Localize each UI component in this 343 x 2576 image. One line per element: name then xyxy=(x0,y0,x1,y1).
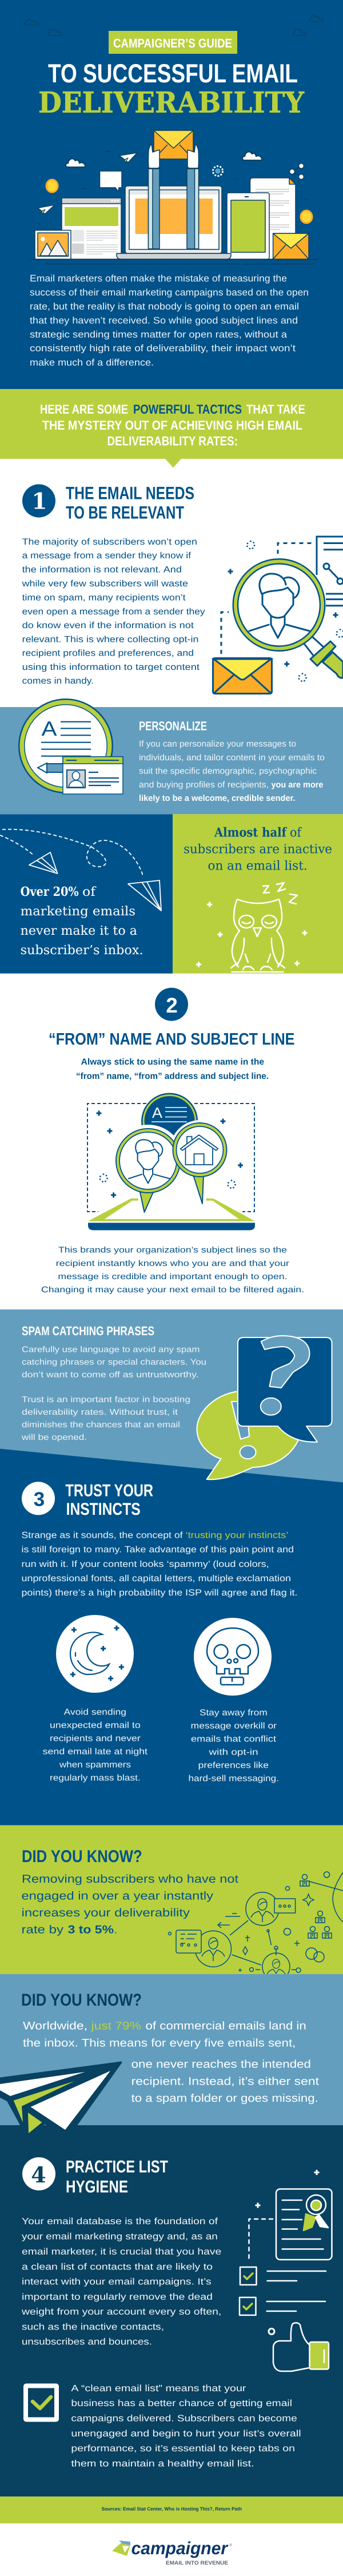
clean email list text: A “clean email list” means that your xyxy=(71,2384,246,2394)
document xyxy=(250,178,296,259)
clean email list text: campaigns delivered. Subscribers can become xyxy=(71,2414,297,2423)
heading: THE EMAIL NEEDS xyxy=(66,483,194,503)
stat text xyxy=(184,825,332,874)
body text: will be opened. xyxy=(21,1433,87,1442)
illustration: people network xyxy=(168,1872,343,1980)
icon: sleeping owl xyxy=(196,883,308,972)
heading: “FROM” NAME AND SUBJECT LINE xyxy=(49,1030,295,1049)
body text: If you can personalize your messages to xyxy=(139,739,296,749)
number 3 badge: 3 xyxy=(34,1489,45,1510)
body text xyxy=(21,2217,221,2347)
illustration: location pins on tablet: A xyxy=(152,1104,163,1121)
title xyxy=(38,58,305,119)
body text: catching phrases or special characters. You xyxy=(22,1358,206,1367)
panel: practice list hygiene xyxy=(0,2062,343,2496)
section 3: trust your instincts xyxy=(22,1482,297,1784)
heading: DID YOU KNOW? xyxy=(21,1991,142,2010)
caption: stay away: Stay away from xyxy=(200,1708,268,1717)
paragraph xyxy=(41,1246,304,1295)
body text xyxy=(22,1873,239,1936)
body text: important to regularly remove the dead xyxy=(22,2292,213,2302)
body text: increases your deliverability xyxy=(22,1907,190,1919)
body text: Carefully use language to avoid any spam xyxy=(22,1345,200,1355)
banner heading: HERE ARE SOME xyxy=(40,402,128,416)
intro text: Email marketers often make the mistake of measuring the xyxy=(30,273,287,284)
intro text xyxy=(30,273,309,368)
body text: the information is not relevant. And xyxy=(22,565,182,575)
intro text: consistently high rate of deliverability, their impact won’t xyxy=(30,343,296,354)
browser window xyxy=(62,198,121,259)
icon: moon and stars xyxy=(56,1615,134,1693)
body text: weight from your account every so often, xyxy=(21,2307,221,2317)
intro text: strategic sending times matter for open rates, without a xyxy=(30,330,288,340)
body text: a clean list of contacts that are likely to xyxy=(22,2262,213,2272)
envelope held up xyxy=(154,130,193,159)
logo: campaigner: campaigner xyxy=(131,2538,229,2558)
clean email list text: performance, so it’s essential to keep tabs on xyxy=(71,2444,295,2454)
small envelope xyxy=(273,233,309,259)
clean email list text xyxy=(71,2384,301,2469)
banner heading: THAT TAKE xyxy=(246,402,305,416)
body text xyxy=(139,739,325,803)
clean email list text: unengaged and begin to hurt your list’s overall xyxy=(71,2429,301,2439)
title: DELIVERABILITY xyxy=(38,86,305,119)
panel: did you know 2 xyxy=(0,1974,343,2125)
stat text: on an email list. xyxy=(208,859,308,874)
body text: a message from a sender they know if xyxy=(22,551,192,561)
number 3 badge xyxy=(22,1482,55,1515)
number 2 badge: 2 xyxy=(166,994,178,1017)
body text: Your email database is the foundation of xyxy=(22,2217,218,2226)
heading xyxy=(66,483,194,523)
caption: avoid sending: Avoid sending xyxy=(64,1707,126,1717)
body text: email marketer, it is crucial that you have xyxy=(22,2247,221,2257)
subheading: Always stick to using the same name in the xyxy=(81,1057,264,1067)
icon: paper planes with dashed flight paths xyxy=(0,829,161,911)
body text: even open a message from a sender they xyxy=(22,607,205,617)
caption: stay away xyxy=(189,1708,279,1784)
body text: time on spam, many recipients won’t xyxy=(22,593,186,603)
panel: almost half stat xyxy=(173,814,343,974)
paper planes xyxy=(38,153,137,215)
intro text: rate, but the reality is that nobody is going to open an email xyxy=(30,301,299,312)
white clouds xyxy=(66,152,262,167)
body text: interact with your email campaigns. It’s xyxy=(22,2277,212,2287)
body text: Removing subscribers who have not xyxy=(22,1873,239,1886)
number 2 badge xyxy=(155,988,188,1021)
number 1 badge: 1 xyxy=(31,489,47,515)
body text: using this information to target content xyxy=(22,662,200,672)
body text: is still foreign to many. Take advantage of this pain point and xyxy=(22,1545,294,1555)
body text xyxy=(21,537,205,686)
body text: unsubscribes and bounces. xyxy=(22,2337,152,2347)
caption: avoid sending: send email late at night xyxy=(43,1747,148,1757)
body text: relevant. This is where collecting opt-in xyxy=(22,635,198,645)
clean email list text: them to maintain a healthy email list. xyxy=(71,2459,254,2469)
body text: deliverability rates. Without trust, it xyxy=(22,1408,178,1417)
stat text: subscriber’s inbox. xyxy=(21,943,143,958)
stat text: subscribers are inactive xyxy=(184,843,332,857)
badge: Campaigner's Guide: CAMPAIGNER’S GUIDE xyxy=(113,36,232,50)
body text: recipient profiles and preferences, and xyxy=(22,649,194,658)
speech bubble xyxy=(99,171,122,192)
icon: large checkbox xyxy=(26,2386,57,2420)
body text: individuals, and tailor content in your emails to xyxy=(139,753,325,763)
body text: your email marketing strategy and, as an xyxy=(22,2232,218,2241)
banner heading: DELIVERABILITY RATES: xyxy=(107,434,238,448)
illustration: location pins on tablet xyxy=(87,1094,255,1230)
badge: Campaigner's Guide xyxy=(109,31,237,54)
heading: HYGIENE xyxy=(66,2177,128,2197)
body text: do know even if the information is not xyxy=(22,621,194,630)
intro text: that they haven’t received. So while good subject lines and xyxy=(30,316,298,326)
illustration: magnifying glass over profile xyxy=(213,537,343,693)
body text: Strange as it sounds, the concept of xyxy=(22,1531,183,1541)
caption: stay away: message overkill or xyxy=(191,1721,277,1730)
body text: comes in handy. xyxy=(22,676,94,686)
heading: DID YOU KNOW? xyxy=(22,1847,142,1866)
stat text: Over 20% xyxy=(21,884,79,899)
heading: PRACTICE LIST xyxy=(66,2158,168,2176)
caption: avoid sending: recipients and never xyxy=(50,1733,141,1743)
caption: stay away: preferences like xyxy=(198,1761,269,1770)
body text: . xyxy=(114,1923,117,1936)
body text: the inbox. This means for every five emails sent, xyxy=(23,2037,296,2049)
panel: did you know 1 xyxy=(0,1825,343,1980)
number 4 badge: 4 xyxy=(31,2162,46,2188)
icon: question and exclamation speech bubbles xyxy=(197,1336,332,1479)
banner heading: POWERFUL TACTICS xyxy=(133,402,242,416)
section 2: from name and subject line xyxy=(41,988,304,1295)
body text: one never reaches the intended xyxy=(131,2058,311,2070)
panel: over 20% stat xyxy=(0,814,173,974)
icon: document and profile card xyxy=(18,698,123,794)
body text: diminishes the chances that an email xyxy=(22,1420,180,1430)
caption: avoid sending xyxy=(43,1707,148,1783)
stat text: Almost half xyxy=(214,825,287,840)
body text: points) there’s a high probability the ISP will agree and flag it. xyxy=(22,1588,297,1598)
footer: sources: Sources: Email Stat Center, Who is Hosting This?, Return Path xyxy=(102,2506,242,2511)
intro text: success of their email marketing campaigns based on the open xyxy=(30,287,309,297)
body text: Worldwide, xyxy=(23,2019,87,2032)
paragraph: This brands your organization’s subject lines so the xyxy=(58,1246,287,1255)
caption: avoid sending: when spammers xyxy=(59,1760,131,1770)
body text: such as the inactive contacts, xyxy=(22,2323,164,2332)
body text: you are more xyxy=(271,780,324,790)
icon: document and profile card: A xyxy=(41,717,57,740)
laptop xyxy=(117,186,231,259)
body text: suit the specific demographic, psychographic xyxy=(139,767,317,776)
body text xyxy=(23,2019,320,2105)
heading: SPAM CATCHING PHRASES xyxy=(22,1324,154,1338)
tablet xyxy=(227,193,269,259)
icons: certificate, checklist, thumbs up xyxy=(240,2170,332,2371)
caption: stay away: with opt-in xyxy=(208,1747,258,1757)
stat text: of xyxy=(290,826,302,840)
caption: stay away: hard-sell messaging. xyxy=(189,1773,279,1784)
body text: ‘trusting your instincts’ xyxy=(185,1531,288,1541)
heading: TO BE RELEVANT xyxy=(66,503,184,523)
heading: PERSONALIZE xyxy=(139,719,207,733)
banner heading: THE MYSTERY OUT OF ACHIEVING HIGH EMAIL xyxy=(42,418,302,432)
stat text: marketing emails xyxy=(21,904,135,919)
subheading: “from” name, “from” address and subject line. xyxy=(76,1071,269,1081)
panel: spam catching phrases xyxy=(0,1309,343,1825)
heading: INSTINCTS xyxy=(66,1500,141,1519)
picture frame xyxy=(35,230,71,259)
coins xyxy=(46,180,312,223)
logo: campaigner xyxy=(112,2538,233,2566)
body text: recipient. Instead, it’s either sent xyxy=(131,2075,320,2087)
body text: The majority of subscribers won’t open xyxy=(22,537,197,547)
body text: 3 to 5% xyxy=(68,1923,114,1936)
body text: unprofessional fonts, all capital letters, multiple exclamation xyxy=(22,1574,291,1583)
banner heading xyxy=(40,402,305,448)
footer: sources xyxy=(0,2496,343,2523)
icon: large paper plane xyxy=(0,2062,121,2134)
body text: likely to be a welcome, credible sender. xyxy=(139,793,296,803)
body text: run with it. If your content looks ‘spammy’ (loud colors, xyxy=(22,1559,269,1569)
logo mark xyxy=(112,2541,130,2556)
panel: header xyxy=(0,0,343,389)
caption: avoid sending: regularly mass blast. xyxy=(50,1773,141,1783)
panel: personalize xyxy=(0,698,343,814)
icon: skull xyxy=(194,1618,272,1696)
body text: to a spam folder or goes missing. xyxy=(131,2092,318,2105)
heading: TRUST YOUR xyxy=(65,1482,153,1501)
body text: while very few subscribers will waste xyxy=(21,579,188,589)
illustration: devices and email xyxy=(30,130,318,264)
section 1: the email needs to be relevant xyxy=(21,483,343,693)
caption: stay away: emails that conflict xyxy=(191,1734,277,1744)
gear xyxy=(213,166,223,176)
clean email list text: business has a better chance of getting email xyxy=(71,2399,292,2408)
stat text: never make it to a xyxy=(21,924,137,938)
body text: engaged in over a year instantly xyxy=(22,1890,213,1902)
heading xyxy=(65,1482,153,1519)
body text: don’t want to come off as untrustworthy. xyxy=(22,1371,199,1380)
arms and hands xyxy=(149,144,199,249)
panel: powerful tactics banner xyxy=(0,389,343,468)
body text xyxy=(22,1531,297,1598)
heading xyxy=(66,2158,168,2197)
body text xyxy=(21,1345,206,1442)
paragraph: Changing it may cause your next email to be filtered again. xyxy=(41,1285,304,1295)
stat text: of xyxy=(82,885,97,899)
number 1 badge xyxy=(22,484,55,517)
logo: campaigner: ® xyxy=(229,2543,233,2547)
share nodes xyxy=(289,164,304,180)
stat text xyxy=(21,884,143,958)
paragraph: recipient instantly knows who you are and that your xyxy=(56,1259,289,1268)
paragraph: message is credible and important enough to open. xyxy=(58,1272,288,1281)
background clouds xyxy=(25,15,323,35)
logo: campaigner: EMAIL INTO REVENUE xyxy=(166,2560,228,2566)
intro text: make much of a difference. xyxy=(30,358,154,368)
caption: avoid sending: unexpected email to xyxy=(50,1720,141,1730)
body text: just 79% xyxy=(90,2019,141,2032)
body text: Trust is an important factor in boosting xyxy=(22,1395,190,1404)
body text: of commercial emails land in xyxy=(145,2019,306,2032)
subheading xyxy=(76,1057,269,1081)
body text: rate by xyxy=(22,1923,63,1936)
body text: and buying profiles of recipients, xyxy=(139,780,269,790)
number 4 badge xyxy=(22,2157,55,2190)
